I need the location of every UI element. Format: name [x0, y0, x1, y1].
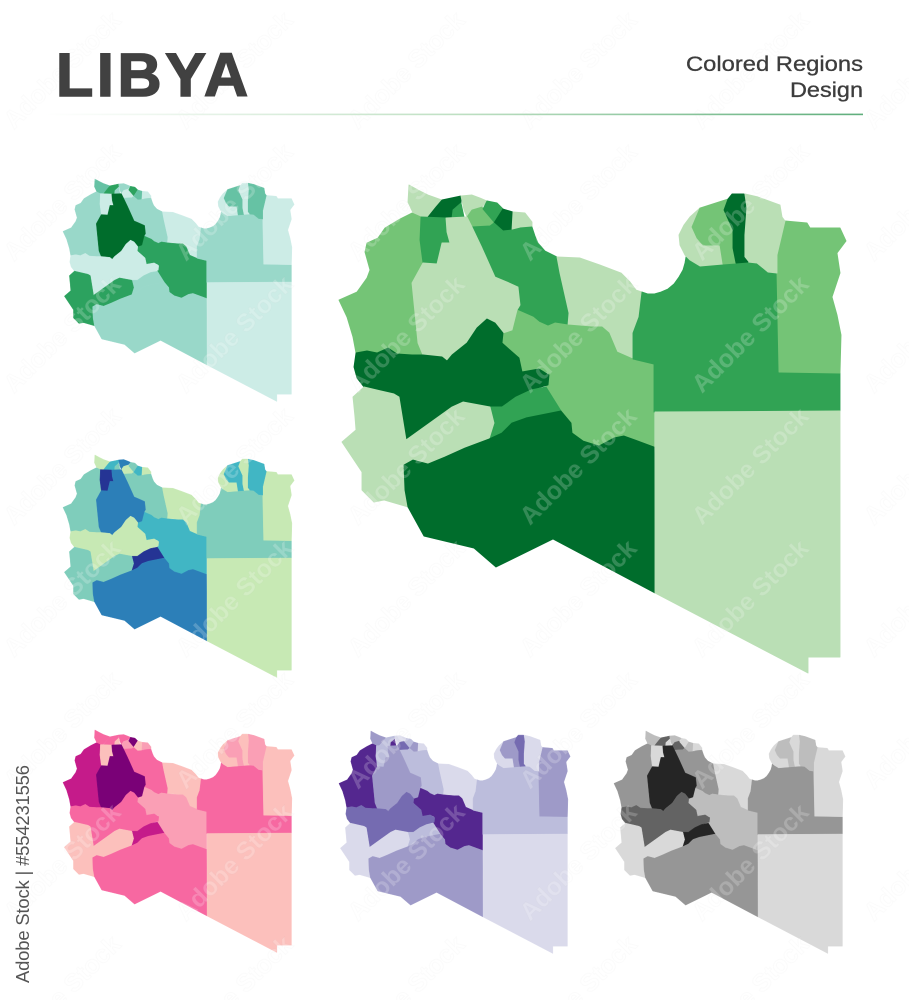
title: LIBYA — [56, 41, 248, 109]
map: small blue — [63, 455, 294, 677]
subtitle — [686, 53, 863, 102]
map: small purple — [339, 731, 570, 953]
subtitle: Colored Regions — [686, 53, 863, 76]
map: small grey — [614, 731, 845, 953]
header rule — [45, 114, 863, 115]
stock id text: Adobe Stock | #554231556 — [12, 765, 33, 983]
subtitle: Design — [790, 79, 863, 102]
map: small pink — [63, 730, 294, 952]
map: small teal — [63, 179, 294, 401]
map: large green — [339, 185, 846, 673]
